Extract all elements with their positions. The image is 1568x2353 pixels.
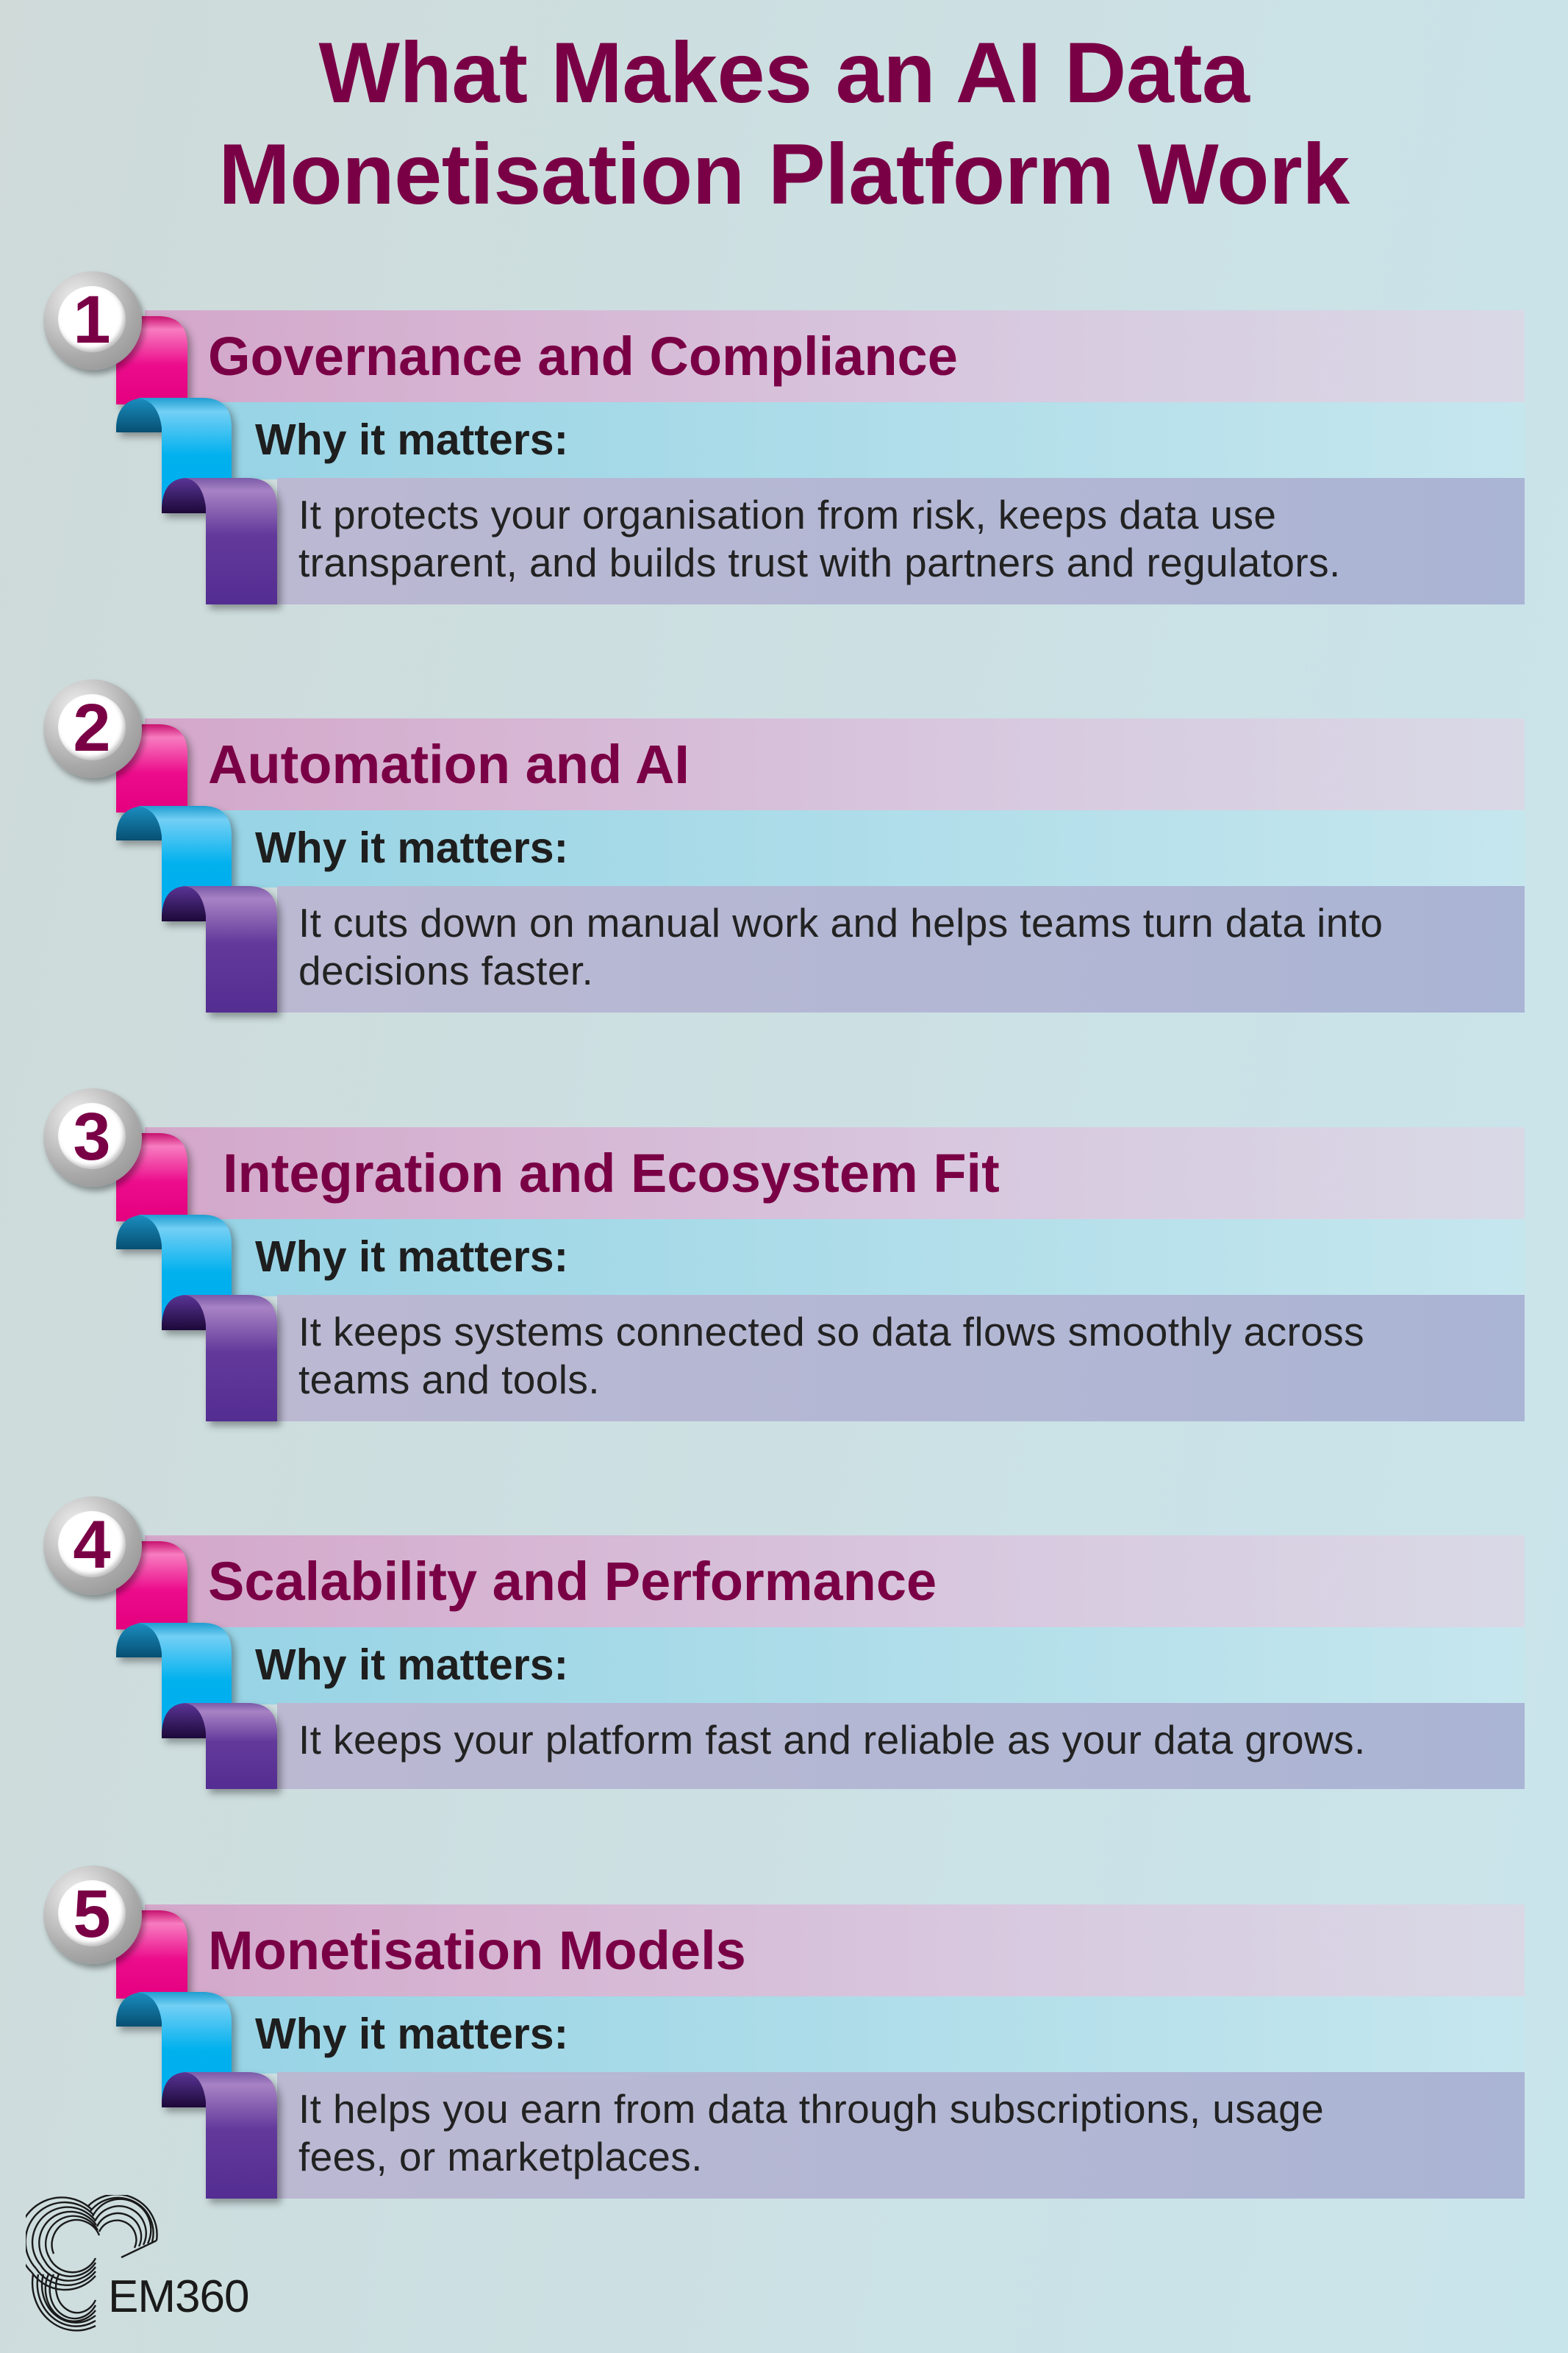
title [218,24,1350,222]
text block 3 [298,1309,1364,1402]
text block 2: decisions faster. [298,948,593,993]
subheading 3: Why it matters: [255,1232,568,1281]
icon: badge 4 [43,1496,142,1595]
panel: section 2 automation [43,679,1525,1021]
heading 1: Governance and Compliance [208,326,958,387]
panel: section 5 monetisation [31,1865,1525,2332]
text block 5: fees, or marketplaces. [298,2134,703,2179]
text block 3: It keeps systems connected so data flows smoothly across [298,1309,1364,1354]
title: What Makes an AI Data [319,24,1250,121]
icon: badge 5 [43,1865,142,1964]
icon: badge 2: 2 [73,690,111,765]
icon: ribbon 3 [115,1133,285,1430]
text block 5 [298,2086,1324,2179]
icon: swirl [26,2195,158,2332]
subheading 2: Why it matters: [255,824,568,872]
text block 1 [298,492,1341,585]
heading 4: Scalability and Performance [208,1551,937,1612]
subheading 5: Why it matters: [255,2010,568,2058]
text block 4: It keeps your platform fast and reliable as your data grows. [298,1717,1366,1763]
icon: ribbon 1 [115,316,285,613]
heading 3: Integration and Ecosystem Fit [223,1143,1000,1204]
text block 1: transparent, and builds trust with partners and regulators. [298,540,1341,585]
icon: badge 1 [43,271,142,370]
panel: section 3 integration [43,1088,1525,1430]
text block 5: It helps you earn from data through subscriptions, usage [298,2086,1324,2132]
icon: badge 1: 1 [73,282,111,357]
icon: ribbon 4 [115,1541,285,1798]
text block 2: It cuts down on manual work and helps teams turn data into [298,900,1383,946]
panel: section 4 scalability [43,1496,1525,1798]
text block 2 [298,900,1383,993]
subheading 4: Why it matters: [255,1640,568,1689]
icon: badge 3 [43,1088,142,1187]
text block 3: teams and tools. [298,1357,600,1402]
text block 1: It protects your organisation from risk, keeps data use [298,492,1276,538]
icon: badge 5: 5 [73,1877,111,1952]
icon: ribbon 5 [115,1910,285,2207]
heading 2: Automation and AI [208,734,690,795]
icon: badge 3: 3 [73,1099,111,1174]
icon: badge 4: 4 [73,1507,111,1582]
panel: section 1 governance [43,271,1525,613]
text: EM360: EM360 [108,2271,248,2322]
heading 5: Monetisation Models [208,1920,746,1981]
icon: ribbon 2 [115,724,285,1021]
title: Monetisation Platform Work [218,126,1350,222]
icon: badge 2 [43,679,142,778]
subheading 1: Why it matters: [255,415,568,464]
logo: EM360 [26,2195,248,2332]
